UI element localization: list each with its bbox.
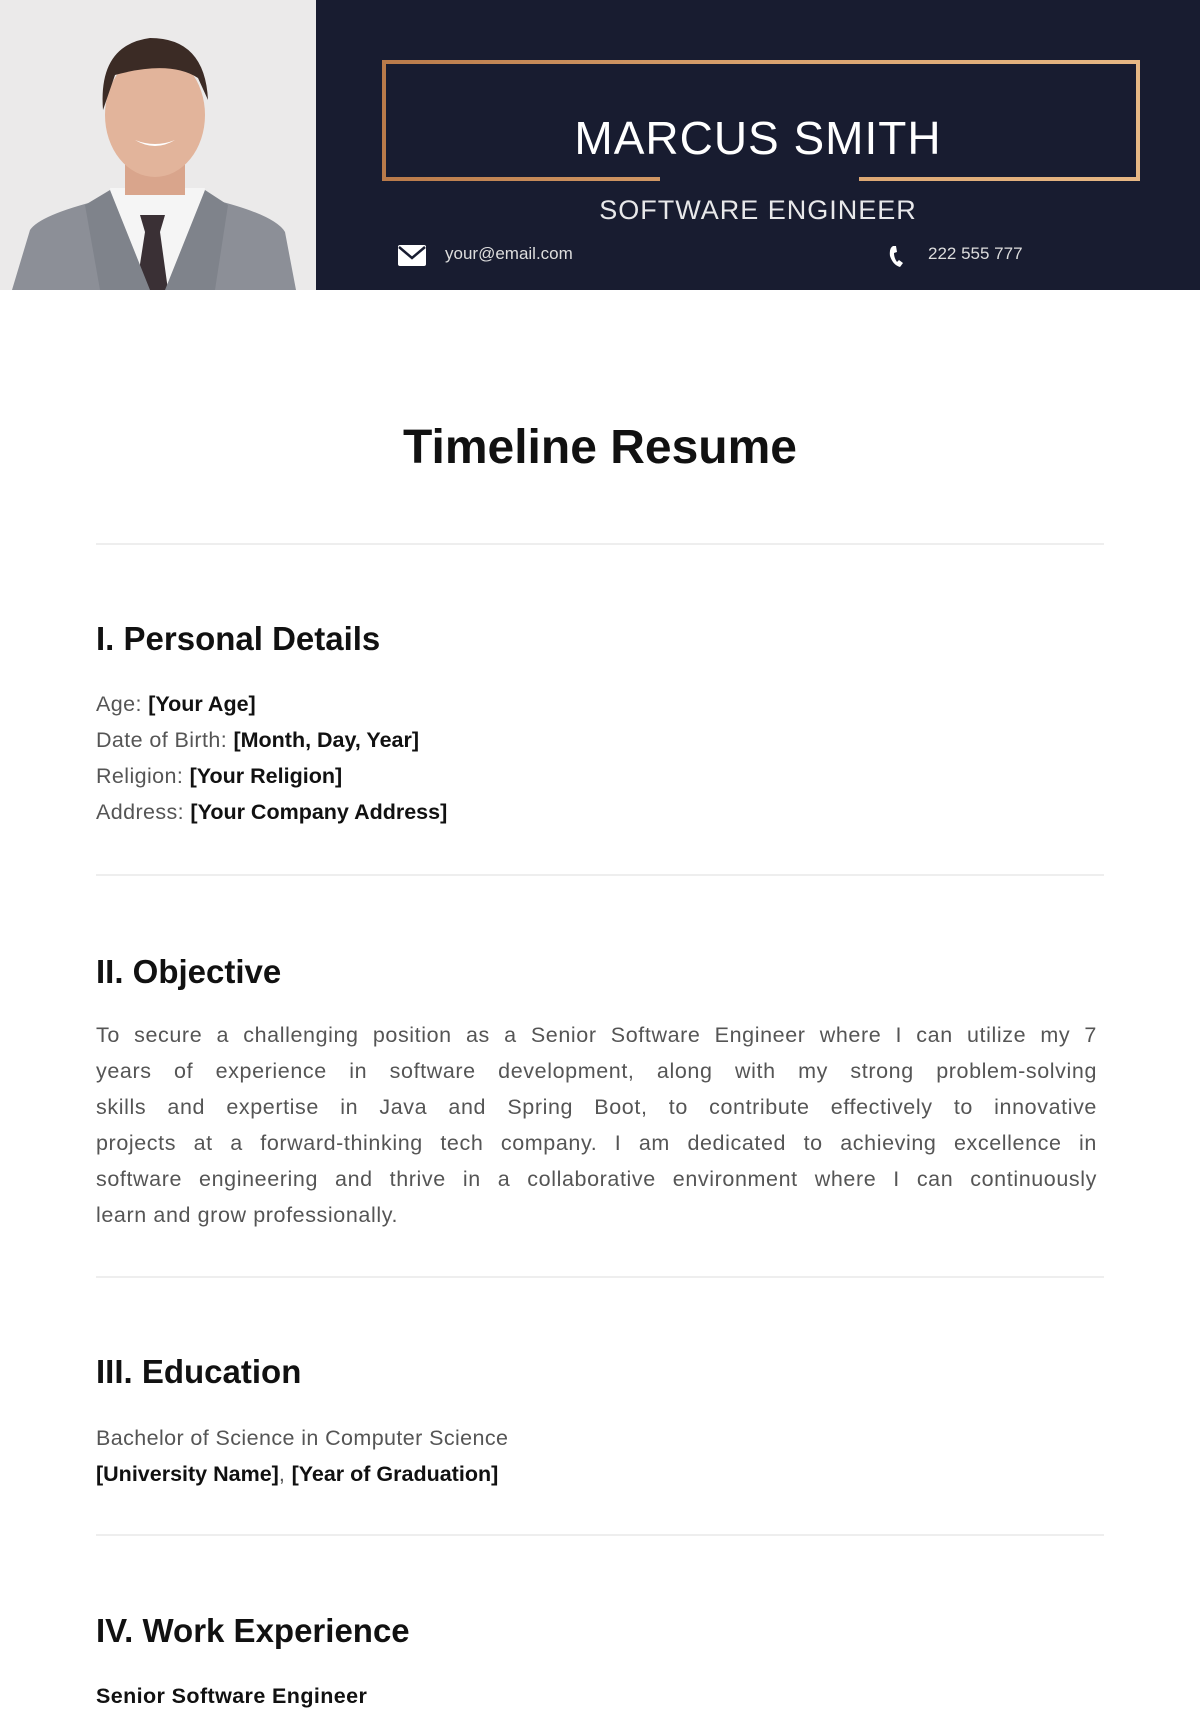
- text: education details: [96, 1426, 508, 1486]
- header banner: [316, 0, 1200, 290]
- text: education details: [University Name], [Year of Graduation]: [96, 1462, 498, 1486]
- text: objective paragraph: software engineering and thrive in a collaborative environment where I can continuously: [96, 1167, 1097, 1191]
- text: personal details list: Age: [Your Age]: [96, 692, 256, 716]
- photo: [0, 0, 316, 290]
- text: personal details list: Religion: [Your Religion]: [96, 764, 342, 788]
- text: personal details list: Date of Birth: [Month, Day, Year]: [96, 728, 419, 752]
- heading: education: III. Education: [96, 1353, 301, 1390]
- text: objective paragraph: learn and grow professionally.: [96, 1203, 398, 1227]
- section: personal details: [96, 620, 447, 824]
- text: objective paragraph: years of experience in software development, along with my strong problem-solving: [96, 1059, 1097, 1083]
- section: education: [96, 1353, 508, 1486]
- name: MARCUS SMITH: [574, 112, 942, 164]
- phone contact: 222 555 777: [928, 244, 1023, 263]
- text: objective paragraph: skills and expertise in Java and Spring Boot, to contribute effectively to innovative: [96, 1095, 1097, 1119]
- heading: objective: II. Objective: [96, 953, 281, 990]
- heading: personal details: I. Personal Details: [96, 620, 380, 657]
- text: objective paragraph: To secure a challenging position as a Senior Software Engineer where I can utilize my 7: [96, 1023, 1097, 1047]
- text: education details: Bachelor of Science in Computer Science: [96, 1426, 508, 1450]
- section: objective: [96, 953, 1097, 1227]
- text: personal details list: [96, 692, 447, 824]
- phone contact: [890, 244, 1023, 267]
- job title: SOFTWARE ENGINEER: [599, 195, 917, 225]
- gold frame: [382, 60, 1140, 181]
- text: job title: Senior Software Engineer: [96, 1684, 367, 1708]
- icon: envelope: [398, 245, 426, 266]
- email contact: [398, 244, 573, 266]
- text: objective paragraph: [96, 1023, 1097, 1227]
- heading: work experience: IV. Work Experience: [96, 1612, 410, 1649]
- text: objective paragraph: projects at a forward-thinking tech company. I am dedicated to achieving excellence in: [96, 1131, 1097, 1155]
- email contact: your@email.com: [445, 244, 573, 263]
- text: personal details list: Address: [Your Company Address]: [96, 800, 447, 824]
- title: Timeline Resume: [403, 421, 797, 474]
- section: work experience: [96, 1612, 410, 1708]
- icon: phone: [890, 246, 903, 267]
